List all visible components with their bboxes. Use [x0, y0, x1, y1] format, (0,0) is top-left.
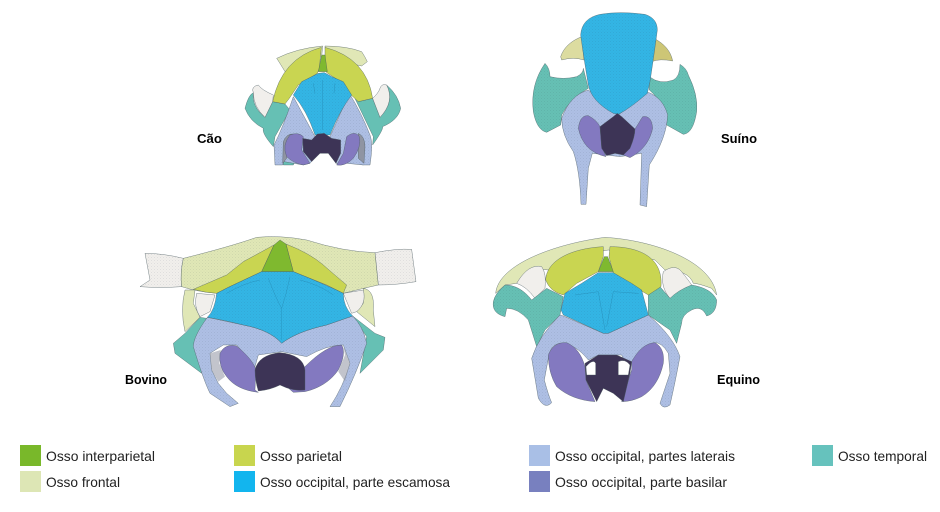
- occipital lateral parts: [274, 93, 372, 165]
- occipital basilar part: [220, 345, 344, 392]
- interparietal bone: [598, 257, 613, 272]
- label: Cão: Cão: [197, 132, 222, 146]
- legend item: Osso occipital, parte escamosa: [234, 471, 450, 492]
- frontal bone: [277, 46, 367, 72]
- skull: Bovino: [140, 237, 416, 407]
- occipital basilar part: [578, 116, 653, 158]
- parietal bone: [193, 244, 347, 293]
- white foramina: [586, 361, 630, 375]
- skull: Cão: [245, 46, 401, 165]
- foramen magnum shading: [303, 133, 341, 163]
- frontal bone: [496, 237, 717, 295]
- interparietal bone: [318, 55, 327, 72]
- occipital lateral parts: [193, 316, 367, 407]
- occipital squamous part: [581, 13, 657, 114]
- legend item: Osso occipital, parte basilar: Osso occipital, parte basilar: [555, 474, 727, 490]
- temporal bone: [533, 63, 697, 134]
- occipital lateral parts: [532, 315, 680, 407]
- skull: Suíno: [533, 13, 697, 207]
- legend item: Osso temporal: [812, 445, 927, 466]
- orbital openings: [517, 266, 692, 298]
- temporal bone: [493, 285, 717, 347]
- label: Equino: Equino: [717, 373, 760, 387]
- horn core stumps: [140, 249, 416, 287]
- interparietal bone: [262, 240, 293, 272]
- legend item: Osso interparietal: [20, 445, 155, 466]
- occipital squamous part: [293, 73, 352, 135]
- skull: Equino: [493, 237, 717, 407]
- frontal bone: [181, 237, 378, 332]
- legend item: Osso interparietal: Osso interparietal: [46, 448, 155, 464]
- legend item: Osso occipital, partes laterais: Osso occipital, partes laterais: [555, 448, 735, 464]
- legend item: Osso occipital, partes laterais: [529, 445, 735, 466]
- parietal bone: [273, 47, 373, 104]
- occipital squamous part: [561, 273, 648, 333]
- occipital lateral parts: [562, 90, 668, 207]
- foramen magnum shading: [600, 113, 635, 156]
- label: Suíno: Suíno: [721, 132, 757, 146]
- legend item: Osso temporal: Osso temporal: [838, 448, 927, 464]
- occipital squamous part: [207, 272, 353, 343]
- foramen magnum shading: [255, 353, 305, 391]
- occipital basilar part: [548, 343, 664, 402]
- temporal bone: [245, 85, 401, 165]
- orbital openings: [196, 290, 364, 317]
- legend item: Osso occipital, parte basilar: [529, 471, 727, 492]
- legend item: Osso frontal: [20, 471, 120, 492]
- temporal bone: [173, 316, 385, 373]
- occipital basilar part: [285, 133, 360, 165]
- legend item: Osso parietal: [234, 445, 342, 466]
- foramen magnum shading: [585, 355, 632, 402]
- legend item: Osso occipital, parte escamosa: Osso occipital, parte escamosa: [260, 474, 450, 490]
- legend item: Osso frontal: Osso frontal: [46, 474, 120, 490]
- parietal bone: [546, 247, 661, 295]
- frontal bone: [561, 37, 673, 62]
- legend item: Osso parietal: Osso parietal: [260, 448, 342, 464]
- legend: [20, 445, 927, 492]
- label: Bovino: Bovino: [125, 373, 167, 387]
